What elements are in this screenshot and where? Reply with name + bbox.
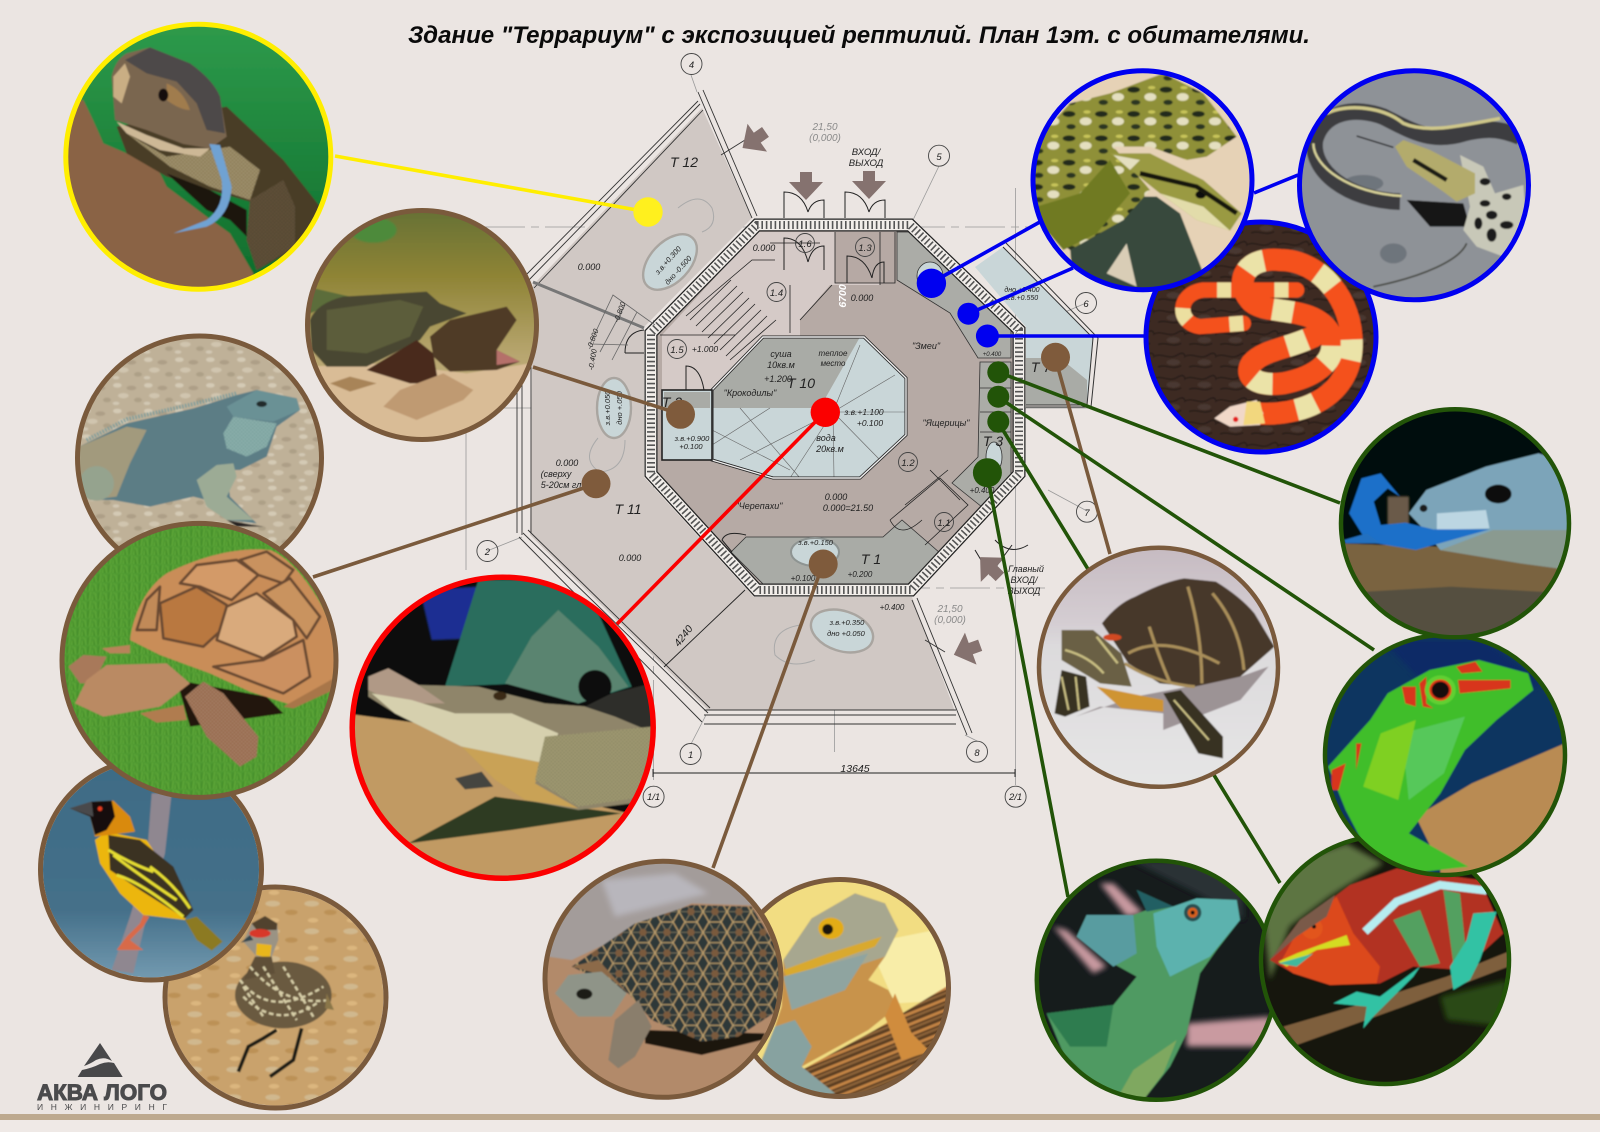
title: Здание "Террариум" с экспозицией рептилий. План 1эт. с обитателями. [408,22,1310,49]
snake and lizard zones [897,232,1011,507]
plan labels: место [821,359,846,368]
plan labels: (0,000) [809,133,841,144]
outer zones T11 and T12 [530,108,954,710]
red dot [811,398,840,427]
zone T6 [975,243,1098,407]
plan labels: 21,50 [936,604,963,615]
plan labels: Т 12 [670,154,698,170]
plan labels: ВЫХОД [1008,586,1041,596]
plan labels: -0.400 [586,348,599,371]
plan labels: (0,000) [934,615,966,626]
plan labels: з.в.+0.300 [653,244,684,277]
photo: garter snake [1297,68,1531,302]
grey arrows [733,118,1012,671]
green connectors [987,372,1374,897]
floor plan [466,54,1098,807]
building octagon floor [651,225,1019,590]
plan labels: ВХОД/ [1011,575,1039,585]
plan labels: Т 10 [787,375,815,391]
photo: pancake tortoise [538,853,792,1107]
location dots [582,197,1070,579]
plan labels: 0.000 [578,262,600,272]
axis markers: 1/1 [647,792,660,803]
plan labels: ВХОД/ [852,147,882,158]
plan labels: вода [816,433,836,443]
plan labels: Т 11 [615,501,641,517]
plan labels: Т 7 [1031,359,1052,375]
brown connectors [313,357,1110,868]
plan labels: дно +.050 [615,390,624,425]
logo subtitle: ИНЖИНИРИНГ [37,1102,167,1112]
green dots [973,361,1009,487]
plan labels: +0.400 [983,352,1002,358]
plan labels: "Змеи" [912,341,941,351]
axis markers: 6 [1083,299,1089,310]
zone T2 [662,390,712,460]
plan labels: з.в.+0.900 [674,434,710,443]
plan labels: +0.100 [857,418,883,428]
photo: panther chameleon [1258,838,1512,1086]
photo: red-eared slider [1036,546,1280,789]
plan labels: дно +0.050 [827,629,866,638]
axis markers: 1.1 [937,518,951,529]
stairs [660,232,968,545]
axis markers: 1.3 [858,243,872,254]
blue dots [917,269,999,348]
plan labels: теплое [819,349,848,358]
dimension line: 4240 [672,623,696,649]
outer walls [517,90,972,735]
plan labels: 0.000 [825,492,847,502]
plan labels: 10кв.м [767,360,795,370]
plan labels: ВЫХОД [849,158,884,169]
plan labels: Главный [1008,564,1044,574]
plan labels: 0.000=21.50 [823,503,873,513]
pools of outer zones [589,199,879,664]
plan labels: з.в.+0.150 [797,538,834,547]
plan labels: 20кв.м [815,444,844,454]
plan labels: +0.400 [970,486,995,495]
walls of the building [651,225,1019,590]
photo: basilisk [1034,858,1272,1102]
axis markers: 1.2 [901,458,915,469]
plan labels: +1.200 [764,374,792,384]
photo: snapping turtle [305,208,539,442]
plan labels: з.в.+0.350 [829,618,865,627]
plan labels: з.в.+0.050 [603,390,612,426]
plan labels: "Ящерицы" [923,418,970,428]
axis markers: 5 [936,152,942,163]
axis markers: 1.6 [798,239,812,250]
dimension line: 13645 [840,763,870,775]
plan labels: 21,50 [811,122,838,133]
axis markers: 8 [974,748,980,759]
photo: monitor lizard [57,13,340,300]
axis markers: 2 [484,547,491,558]
bottom bar [0,1114,1600,1120]
logo mountain icon [78,1043,123,1077]
plan labels: Т 3 [983,433,1003,449]
steps near T12 [590,295,655,360]
red connector [617,412,825,624]
plan labels: з.в.+0.550 [1005,295,1038,302]
photo: python [1027,63,1260,297]
photo: crocodile [345,570,665,890]
plan labels: "Черепахи" [736,501,783,511]
plan labels: суша [770,349,792,359]
axis markers: 1 [688,750,693,761]
plan labels [541,122,1052,638]
plan labels: 0.000 [556,458,578,468]
photo: bearded dragon [754,877,951,1099]
plan labels: з.в.+1.100 [843,407,884,417]
plan labels: 0.000 [619,553,641,563]
axis markers [477,54,1097,807]
plan labels: 0.000 [851,293,873,303]
photo: spurred tortoise [53,513,347,807]
axis markers: 2/1 [1008,792,1022,803]
yellow connector [335,156,648,212]
axis markers: 4 [689,60,694,71]
connector lines [313,156,1374,897]
axis markers: 1.5 [670,345,684,356]
dimension line [653,284,1015,777]
entrance doors [625,192,1028,575]
plan labels: +1.000 [692,344,718,354]
photo: albino king snake [1144,220,1378,454]
axis markers: 7 [1084,508,1090,519]
blue connectors [931,175,1298,336]
plan grid lines [466,75,1090,785]
plan labels: дно +0.400 [1004,286,1040,294]
brown dots [582,343,1070,578]
plan labels: (сверху [541,469,572,479]
plan labels: Т 2 [662,394,682,410]
photo: day gecko [1314,627,1577,877]
plan labels: 0.000 [753,243,775,253]
logo name: АКВА ЛОГО [37,1080,167,1105]
zone T10 crocodile pool [712,337,906,478]
plan labels: -0.800 [585,327,601,351]
photo: blue-tongued skink [1338,407,1572,640]
plan labels: +0.100 [679,442,703,451]
plan labels: +0.100 [791,574,816,583]
photo: francolin [162,884,388,1110]
plan labels: дно -0.500 [663,253,694,287]
yellow dot [633,197,663,227]
axis markers: 1.4 [770,288,783,299]
zone T1 [731,520,940,584]
logo [37,1043,167,1112]
plan labels: 5-20см гл [541,480,581,490]
plan labels: -0.800 [612,300,628,324]
dimension line: 6700 [837,284,849,308]
photo: weaver bird [38,765,264,982]
plan labels: +0.400 [880,603,905,612]
plan labels: Т 1 [861,551,881,567]
plan labels: +0.200 [848,570,873,579]
plan labels: "Крокодилы" [724,388,777,398]
photo: iguana [75,334,324,550]
